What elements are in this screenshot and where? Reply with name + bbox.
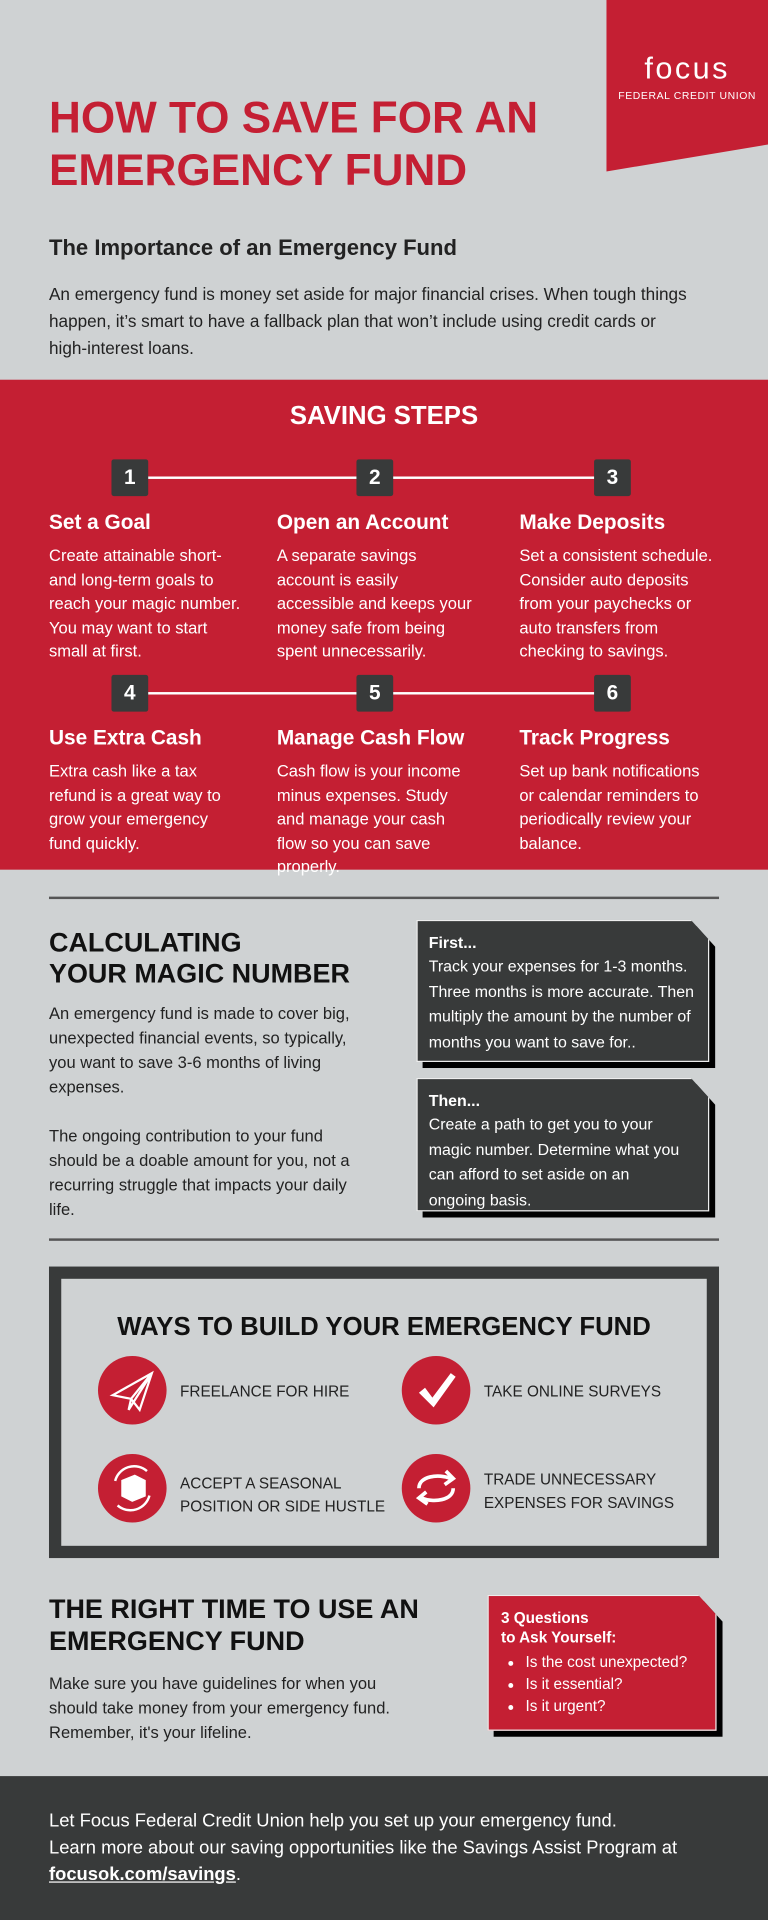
step 1: reach your magic number. bbox=[49, 594, 240, 612]
panel: ways to build bbox=[49, 1267, 719, 1558]
item: trade expenses: EXPENSES FOR SAVINGS bbox=[484, 1494, 674, 1512]
icon: box bbox=[98, 1454, 167, 1523]
step 1: and long-term goals to bbox=[49, 570, 214, 589]
calculating paragraphs: expenses. bbox=[49, 1078, 124, 1096]
calculating paragraphs: An emergency fund is made to cover big, bbox=[49, 1004, 350, 1023]
calculating paragraphs bbox=[49, 1004, 350, 1219]
icon: paper plane bbox=[98, 1356, 167, 1425]
logo text: FEDERAL CREDIT UNION bbox=[618, 89, 756, 102]
heading: calculating bbox=[49, 927, 350, 988]
step 4: grow your emergency bbox=[49, 810, 208, 828]
step 1: 1 bbox=[124, 465, 136, 489]
step 5: minus expenses. Study bbox=[277, 786, 448, 804]
step 3: auto transfers from bbox=[519, 618, 658, 636]
panel: saving steps bbox=[0, 380, 768, 870]
step 2: money safe from being bbox=[277, 618, 445, 636]
step 1 bbox=[49, 459, 240, 660]
step 1: small at first. bbox=[49, 642, 142, 660]
step 4 bbox=[49, 674, 221, 852]
step 5: 5 bbox=[369, 681, 381, 704]
step 6: or calendar reminders to bbox=[519, 786, 699, 804]
note: 3 questions: to Ask Yourself: bbox=[501, 1629, 616, 1646]
calculating paragraphs: recurring struggle that impacts your daily bbox=[49, 1176, 347, 1194]
step 6: 6 bbox=[607, 681, 618, 704]
note: then: magic number. Determine what you bbox=[429, 1140, 679, 1158]
note: 3 questions: Is it urgent? bbox=[525, 1698, 606, 1715]
footer text: Learn more about our saving opportunities like the Savings Assist Program at bbox=[49, 1837, 677, 1858]
step 2: account is easily bbox=[277, 570, 398, 589]
footer text: focusok.com/savings. bbox=[49, 1864, 241, 1885]
step 4: refund is a great way to bbox=[49, 786, 221, 804]
logo text bbox=[619, 56, 755, 99]
heading: ways: WAYS TO BUILD YOUR EMERGENCY FUND bbox=[117, 1313, 651, 1341]
heading: calculating: CALCULATING bbox=[49, 927, 242, 958]
note: first: multiply the amount by the number of bbox=[429, 1007, 691, 1025]
step 5: Manage Cash Flow bbox=[277, 726, 464, 750]
icon: swap arrows bbox=[402, 1454, 470, 1523]
calculating paragraphs: unexpected financial events, so typically, bbox=[49, 1029, 347, 1047]
step 3: Make Deposits bbox=[519, 511, 665, 534]
step 3: Set a consistent schedule. bbox=[519, 546, 712, 565]
calculating paragraphs: life. bbox=[49, 1200, 75, 1219]
step 5: and manage your cash bbox=[277, 810, 445, 828]
title bbox=[49, 92, 538, 195]
step 1: Set a Goal bbox=[49, 511, 151, 534]
step 2: spent unnecessarily. bbox=[277, 642, 426, 660]
right time paragraph: should take money from your emergency fund. bbox=[49, 1699, 390, 1717]
note: first bbox=[416, 920, 716, 1068]
item: freelance: FREELANCE FOR HIRE bbox=[180, 1383, 349, 1400]
step 6: periodically review your bbox=[519, 810, 691, 828]
logo text: focus bbox=[644, 51, 730, 86]
step 3: Consider auto deposits bbox=[519, 570, 689, 589]
heading: right time: EMERGENCY FUND bbox=[49, 1625, 305, 1656]
note: first: Track your expenses for 1-3 months. bbox=[429, 957, 687, 975]
item: seasonal bbox=[180, 1475, 385, 1515]
footer bbox=[0, 1776, 768, 1920]
note: first: First... bbox=[429, 933, 477, 952]
title: EMERGENCY FUND bbox=[49, 145, 467, 195]
step 4: 4 bbox=[124, 681, 136, 704]
right time paragraph: Make sure you have guidelines for when you bbox=[49, 1674, 376, 1693]
step 6 bbox=[519, 674, 700, 852]
logo panel bbox=[606, 0, 768, 171]
icon: checkmark bbox=[402, 1356, 470, 1425]
note: 3 questions: 3 Questions bbox=[501, 1610, 589, 1627]
note: then bbox=[416, 1078, 716, 1218]
intro paragraph: An emergency fund is money set aside for major financial crises. When tough things bbox=[49, 284, 687, 304]
item: trade expenses bbox=[484, 1471, 674, 1512]
step 3: checking to savings. bbox=[519, 642, 668, 660]
step 1: You may want to start bbox=[49, 618, 207, 636]
step 3: from your paychecks or bbox=[519, 594, 691, 612]
right time paragraph bbox=[49, 1674, 390, 1742]
step 6: Track Progress bbox=[519, 726, 670, 750]
note: then: can afford to set aside on an bbox=[429, 1165, 629, 1183]
heading: right time: THE RIGHT TIME TO USE AN bbox=[49, 1594, 419, 1624]
step 2: Open an Account bbox=[277, 511, 448, 534]
note: then: ongoing basis. bbox=[429, 1190, 531, 1208]
footer text: Let Focus Federal Credit Union help you set up your emergency fund. bbox=[49, 1810, 617, 1831]
step 4: Use Extra Cash bbox=[49, 726, 202, 750]
intro paragraph: happen, it’s smart to have a fallback plan that won’t include using credit cards or bbox=[49, 311, 656, 331]
note: then: Then... bbox=[429, 1091, 480, 1110]
step 2: A separate savings bbox=[277, 546, 417, 565]
step 6: Set up bank notifications bbox=[519, 762, 700, 780]
step 3: 3 bbox=[607, 465, 618, 489]
note: 3 questions bbox=[488, 1595, 723, 1737]
step 1: Create attainable short- bbox=[49, 546, 222, 565]
step 5: properly. bbox=[277, 857, 340, 876]
note: 3 questions: Is the cost unexpected? bbox=[525, 1654, 687, 1671]
subtitle: importance: The Importance of an Emergency Fund bbox=[49, 235, 457, 260]
step 4: Extra cash like a tax bbox=[49, 762, 197, 780]
note: 3 questions: Is it essential? bbox=[525, 1676, 623, 1693]
step 5: flow so you can save bbox=[277, 834, 430, 852]
intro paragraph: high-interest loans. bbox=[49, 338, 194, 358]
calculating paragraphs: should be a doable amount for you, not a bbox=[49, 1151, 350, 1170]
step 4: fund quickly. bbox=[49, 834, 140, 852]
heading: right time bbox=[49, 1594, 419, 1656]
item: seasonal: POSITION OR SIDE HUSTLE bbox=[180, 1498, 385, 1515]
step 2 bbox=[276, 459, 472, 660]
heading: saving steps: SAVING STEPS bbox=[290, 402, 478, 430]
note: then: Create a path to get you to your bbox=[429, 1115, 653, 1133]
step 6: balance. bbox=[519, 834, 582, 852]
note: first: Three months is more accurate. Then bbox=[429, 982, 694, 1000]
step 5: Cash flow is your income bbox=[277, 762, 461, 780]
note: first: months you want to save for.. bbox=[429, 1032, 636, 1050]
step 2: 2 bbox=[369, 465, 381, 489]
heading: calculating: YOUR MAGIC NUMBER bbox=[49, 958, 350, 988]
calculating paragraphs: you want to save 3-6 months of living bbox=[49, 1053, 321, 1072]
item: seasonal: ACCEPT A SEASONAL bbox=[180, 1475, 341, 1492]
right time paragraph: Remember, it's your lifeline. bbox=[49, 1723, 252, 1742]
step 5 bbox=[277, 674, 464, 876]
step 3 bbox=[519, 459, 712, 660]
item: surveys: TAKE ONLINE SURVEYS bbox=[484, 1383, 661, 1400]
item: trade expenses: TRADE UNNECESSARY bbox=[484, 1471, 656, 1488]
intro paragraph bbox=[49, 284, 687, 358]
calculating paragraphs: The ongoing contribution to your fund bbox=[49, 1127, 323, 1145]
step 2: accessible and keeps your bbox=[277, 594, 472, 612]
footer text bbox=[49, 1810, 677, 1885]
title: HOW TO SAVE FOR AN bbox=[49, 92, 538, 142]
